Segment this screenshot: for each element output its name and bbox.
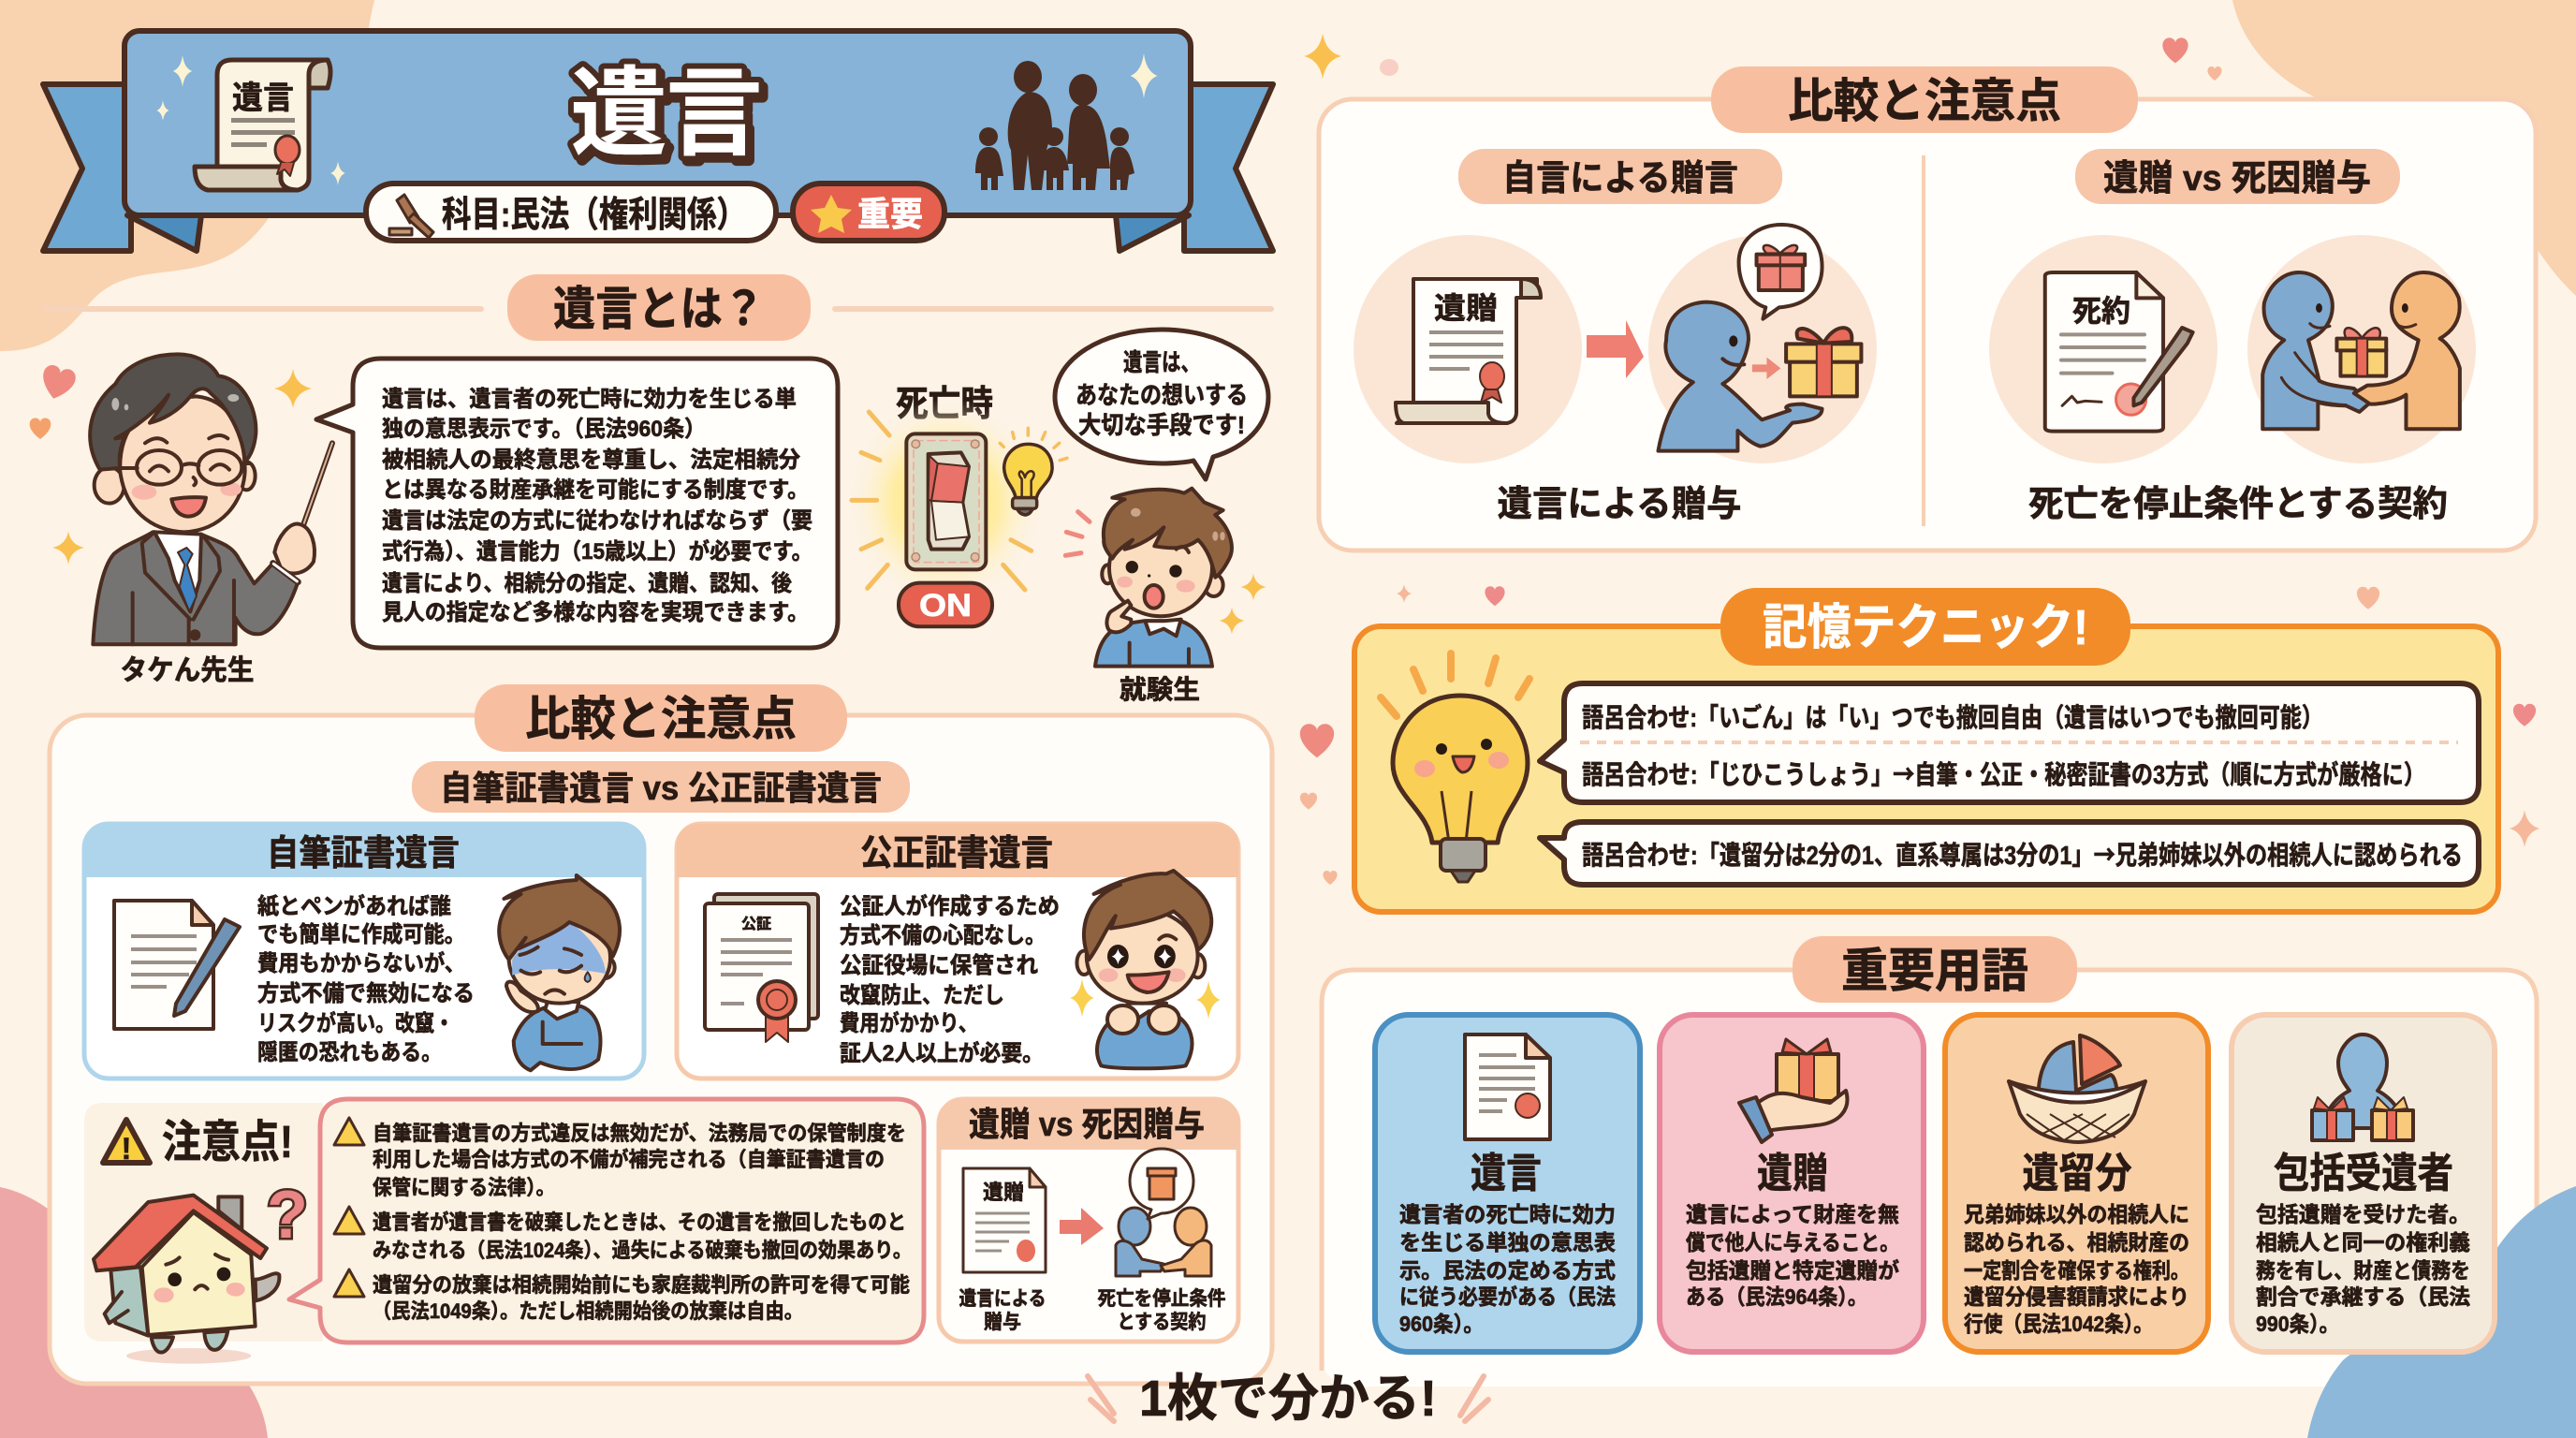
- icon: certificate: [705, 894, 818, 1042]
- mnemonic text 1: 語呂合わせ:「いごん」は「い」つでも撤回自由（遺言はいつでも撤回可能）: [1582, 702, 2323, 732]
- burst lines: [1088, 1376, 1488, 1421]
- scroll label: 遺贈: [1434, 291, 1498, 325]
- caution text: 自筆証書遺言の方式違反は無効だが、法務局での保管制度を: [373, 1122, 906, 1145]
- panel: comparison right: [1319, 66, 2536, 550]
- caption: 遺言による贈与: [1498, 485, 1741, 524]
- sub heading: [1458, 149, 1782, 204]
- heading: comparison: [475, 684, 847, 752]
- label: at death: 死亡時: [896, 385, 993, 424]
- icon: will scroll: [195, 60, 330, 190]
- sub heading: 自筆証書遺言 vs 公正証書遺言: [440, 769, 882, 807]
- term text: 償で他人に与えること。: [1686, 1230, 1899, 1255]
- term text: 960条）。: [1399, 1312, 1484, 1336]
- character: happy student: [1076, 871, 1211, 1068]
- sparkles in banner: [156, 53, 1157, 185]
- subject pill: [366, 183, 776, 241]
- panel: comparison left: [50, 684, 1272, 1384]
- importance pill: [793, 183, 944, 241]
- card header: 公正証書遺言: [860, 834, 1053, 873]
- icon label: 公証: [741, 916, 771, 932]
- speech bubble: student: あなたの想いする: [1076, 381, 1248, 409]
- divider lines: [45, 306, 1271, 312]
- student label: 就験生: [1120, 675, 1200, 704]
- card: notarized will: [677, 824, 1238, 1078]
- speech bubble: definition: 被相続人の最終意思を尊重し、法定相続分: [382, 448, 800, 473]
- term text: 990条）。: [2256, 1312, 2339, 1336]
- heading: comparison: [1711, 66, 2138, 133]
- icon: two people with gift: [2262, 272, 2460, 429]
- decorations around student: [1219, 574, 1266, 634]
- contract label: 死約: [2072, 294, 2130, 328]
- speech bubble: definition: 遺言により、相続分の指定、遺贈、認知、後: [382, 571, 792, 596]
- arrow: [1060, 1208, 1104, 1245]
- subject pill: 科目:民法（権利関係）: [442, 196, 746, 235]
- term text: 遺留分侵害額請求により: [1964, 1284, 2189, 1309]
- rays: [852, 412, 1067, 590]
- caution callout: [289, 1099, 924, 1343]
- term text: を生じる単独の意思表: [1399, 1230, 1616, 1255]
- divider: [1922, 155, 1925, 526]
- sub heading: 自言による贈言: [1502, 159, 1738, 198]
- icon: warning: [103, 1120, 150, 1163]
- speech bubble: definition: とは異なる財産承継を可能にする制度です。: [382, 477, 809, 503]
- caution text: みなされる（民法1024条）、過失による破棄も撤回の効果あり。: [373, 1239, 912, 1262]
- icon: scroll: [1396, 279, 1541, 423]
- panel: memory technique: [1354, 588, 2498, 912]
- body text: 方式不備で無効になる: [257, 981, 475, 1006]
- icon: pie in basket: [2009, 1035, 2145, 1142]
- term card: bequest: [1660, 1015, 1924, 1352]
- body text: 方式不備の心配なし。: [840, 923, 1046, 948]
- term text: [1399, 1202, 1616, 1336]
- heading: comparison: 比較と注意点: [525, 693, 797, 745]
- doc label: 遺贈: [983, 1181, 1024, 1204]
- term title: 遺言: [1471, 1151, 1542, 1196]
- arrow: [1587, 320, 1644, 378]
- column: testamentary gift: [1354, 149, 1877, 524]
- speech bubble: definition: 独の意思表示です。（民法960条）: [382, 417, 706, 442]
- body text: でも簡単に作成可能。: [257, 922, 465, 947]
- mnemonic bubble 2: [1540, 822, 2479, 885]
- icon: person with gifts: [2312, 1034, 2413, 1140]
- body text: 費用もかからないが、: [257, 950, 465, 976]
- term text: 認められる、相続財産の: [1964, 1230, 2189, 1255]
- mini card header: 遺贈 vs 死因贈与: [969, 1105, 1205, 1143]
- term text: [1964, 1202, 2189, 1336]
- icon: document: [963, 1168, 1046, 1272]
- circle backgrounds: [1354, 235, 1877, 463]
- term card: universal legatee: [2232, 1015, 2495, 1352]
- heading: key terms: [1793, 936, 2077, 1003]
- body text: 改竄防止、ただし: [840, 983, 1004, 1008]
- term text: 遺言によって財産を無: [1686, 1202, 1899, 1226]
- term text: [1686, 1202, 1899, 1309]
- term text: 兄弟姉妹以外の相続人に: [1964, 1202, 2189, 1226]
- sub heading: [2075, 149, 2400, 204]
- speech bubble: student: 大切な手段です!: [1078, 411, 1245, 439]
- caution text: [373, 1122, 912, 1323]
- title: 遺言: [570, 60, 763, 169]
- character: student wondering: [1065, 489, 1232, 667]
- caption: 死亡を停止条件とする契約: [2028, 485, 2448, 524]
- icon: person with gift: [1658, 225, 1861, 451]
- body text: 費用がかかり、: [840, 1010, 978, 1036]
- icon: contract: [2045, 272, 2193, 432]
- character: house: [94, 1196, 279, 1364]
- ON label: ON: [919, 588, 972, 624]
- title: 遺言: [574, 65, 767, 173]
- term text: 一定割合を確保する権利。: [1964, 1258, 2189, 1283]
- switch: [906, 433, 986, 569]
- mnemonic text 2: 語呂合わせ:「じひこうしょう」→自筆・公正・秘密証書の3方式（順に方式が厳格に）: [1582, 755, 2425, 792]
- term card: will: [1375, 1015, 1640, 1352]
- term text: 包括遺贈を受けた者。: [2256, 1202, 2470, 1226]
- column: gift upon death: [1989, 149, 2476, 524]
- mini card: bequest vs gift: [939, 1099, 1238, 1342]
- term text: 行使（民法1042条）。: [1964, 1312, 2153, 1336]
- question mark: ?: [267, 1178, 308, 1253]
- speech bubble: definition: 見人の指定など多様な内容を実現できます。: [382, 600, 809, 625]
- circle backgrounds: [1989, 235, 2476, 463]
- term text: に従う必要がある（民法: [1399, 1284, 1616, 1309]
- caution text: 利用した場合は方式の不備が補完される（自筆証書遺言の: [373, 1148, 885, 1171]
- speech bubble: definition: 式行為）、遺言能力（15歳以上）が必要です。: [382, 538, 812, 565]
- caution text: 遺留分の放棄は相続開始前にも家庭裁判所の許可を得て可能: [373, 1273, 910, 1297]
- icon: family silhouette: [975, 61, 1134, 190]
- body text: 隠匿の恐れもある。: [257, 1040, 442, 1065]
- captions: [959, 1288, 1226, 1333]
- speech bubble: definition: 遺言は、遺言者の死亡時に効力を生じる単: [382, 387, 797, 412]
- character: worried student: [499, 875, 620, 1070]
- term title: 遺留分: [2022, 1151, 2132, 1196]
- death switch group: [847, 385, 1067, 626]
- warning mark: !: [122, 1132, 131, 1166]
- card: holographic will: [84, 824, 644, 1078]
- icon: light bulb small: [1004, 444, 1052, 515]
- caution block: [84, 1099, 924, 1364]
- caution heading: 注意点!: [162, 1118, 293, 1167]
- term text: 包括遺贈と特定遺贈が: [1686, 1258, 1899, 1283]
- icon: document and pen: [114, 901, 240, 1029]
- heading: comparison: 比較と注意点: [1788, 75, 2061, 127]
- term title: 遺贈: [1757, 1151, 1828, 1196]
- icon: people handshake: [1116, 1149, 1211, 1276]
- captions: 贈与: [984, 1312, 1021, 1333]
- body text: [257, 893, 475, 1065]
- sparkles: [1070, 979, 1221, 1019]
- icon: smiling bulb: [1381, 653, 1530, 882]
- caution text: （民法1049条）。ただし相続開始後の放棄は自由。: [373, 1299, 803, 1323]
- footer tagline: 1枚で分かる!: [1139, 1371, 1437, 1427]
- body text: リスクが高い。改竄・: [257, 1010, 454, 1036]
- heading: memory technique: 記憶テクニック!: [1763, 601, 2088, 655]
- dashed divider: [1580, 741, 2458, 744]
- body text: 紙とペンがあれば誰: [257, 893, 451, 919]
- header banner: [43, 31, 1273, 251]
- warning icons: [334, 1118, 364, 1297]
- blue corner blob: [2307, 1186, 2576, 1438]
- body text: [840, 893, 1060, 1066]
- ON button: [899, 583, 992, 626]
- icon: gavel: [389, 195, 433, 238]
- panel: key terms: [1320, 936, 2576, 1438]
- mnemonic bubble 1: [1540, 683, 2479, 802]
- importance pill: 重要: [857, 195, 923, 233]
- captions: 死亡を停止条件: [1097, 1288, 1226, 1310]
- mini card header: [939, 1099, 1238, 1150]
- icon: document: [1465, 1034, 1550, 1139]
- term text: 相続人と同一の権利義: [2256, 1230, 2470, 1255]
- ribbon tails: [43, 84, 1273, 251]
- term text: 割合で承継する（民法: [2256, 1284, 2470, 1309]
- term title: 包括受遺者: [2274, 1151, 2453, 1196]
- term text: ある（民法964条）。: [1686, 1284, 1867, 1309]
- heading: key terms: 重要用語: [1841, 945, 2028, 997]
- sub heading: 遺贈 vs 死因贈与: [2103, 159, 2371, 198]
- character: teacher: [90, 354, 332, 644]
- term text: 示。民法の定める方式: [1399, 1258, 1616, 1283]
- switch, button and bulb art: [852, 412, 1067, 626]
- heading: memory technique: [1720, 588, 2130, 666]
- teacher label: タケん先生: [120, 655, 255, 686]
- speech bubble: definition: 遺言は法定の方式に従わなければならず（要: [382, 508, 812, 534]
- term text: 遺言者の死亡時に効力: [1399, 1202, 1616, 1226]
- captions: 遺言による: [959, 1288, 1046, 1310]
- caution text: 保管に関する法律）。: [373, 1176, 555, 1199]
- decorations: hearts and stars right: [1300, 34, 2539, 885]
- term card: reserved portion: [1945, 1015, 2208, 1352]
- speech bubble: student: 遺言は、: [1123, 348, 1200, 376]
- mnemonic text 3: 語呂合わせ:「遺留分は2分の1、直系尊属は3分の1」→兄弟姉妹以外の相続人に認められる: [1582, 835, 2463, 873]
- sub heading: [412, 761, 910, 813]
- body text: 公証役場に保管され: [840, 953, 1038, 978]
- heading: what is a will: [507, 274, 811, 341]
- term text: [2256, 1202, 2470, 1336]
- speech bubble: definition: [316, 359, 838, 648]
- term text: 務を有し、財産と債務を: [2256, 1258, 2470, 1283]
- icon: hand with gift: [1739, 1039, 1847, 1142]
- speech bubble: student: [1055, 330, 1268, 479]
- decorations: hearts and stars left: [30, 363, 312, 565]
- card header: [677, 824, 1238, 877]
- header banner: 遺言: [232, 81, 294, 116]
- caution text: 遺言者が遺言書を破棄したときは、その遺言を撤回したものと: [373, 1211, 906, 1234]
- card header: 自筆証書遺言: [267, 834, 460, 873]
- body text: 公証人が作成するため: [840, 893, 1060, 919]
- captions: とする契約: [1118, 1312, 1206, 1333]
- body text: 証人2人以上が必要。: [840, 1040, 1044, 1066]
- heading: what is a will: 遺言とは？: [553, 283, 765, 335]
- card header: [84, 824, 644, 877]
